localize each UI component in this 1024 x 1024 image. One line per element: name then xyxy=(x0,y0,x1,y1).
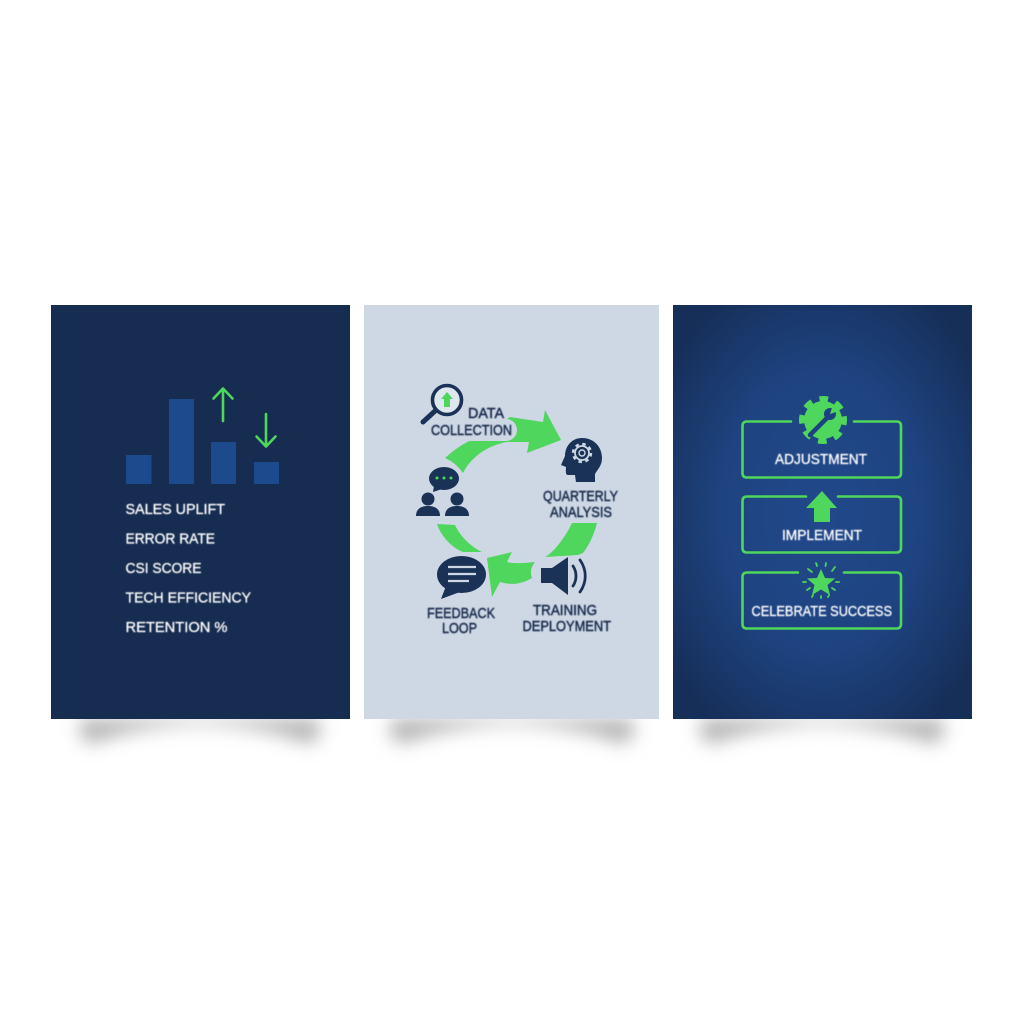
label: implement: IMPLEMENT xyxy=(782,527,862,544)
icon: up arrow xyxy=(806,491,837,522)
label: feedback loop: FEEDBACK xyxy=(427,605,495,622)
box: implement xyxy=(742,491,901,552)
label: data collection: DATA xyxy=(468,405,504,422)
label: training deployment xyxy=(522,602,611,635)
icon: up arrow xyxy=(214,388,232,421)
label: quarterly analysis: QUARTERLY xyxy=(543,488,618,505)
label: data collection: COLLECTION xyxy=(431,422,512,439)
arrow: analysis to training xyxy=(545,523,597,557)
panel: metrics xyxy=(51,305,350,719)
arrow: training to feedback xyxy=(487,552,535,597)
label: adjustment: ADJUSTMENT xyxy=(775,451,867,468)
icon: head with gear xyxy=(561,438,602,482)
label: feedback loop xyxy=(427,605,495,637)
label: quarterly analysis: ANALYSIS xyxy=(550,504,612,521)
metrics list xyxy=(126,501,251,636)
metrics list: ERROR RATE xyxy=(126,530,215,548)
icon: star with rays xyxy=(803,563,839,598)
label: data collection xyxy=(426,405,517,441)
metrics list: SALES UPLIFT xyxy=(126,501,225,518)
metrics list: CSI SCORE xyxy=(126,560,202,577)
icon: speech bubble with people xyxy=(416,467,469,516)
label: quarterly analysis xyxy=(543,488,618,521)
metrics list: RETENTION % xyxy=(126,619,228,636)
box: celebrate success xyxy=(742,563,901,628)
metrics list: TECH EFFICIENCY xyxy=(126,590,251,606)
box: adjustment xyxy=(742,396,901,478)
label: feedback loop: LOOP xyxy=(442,620,477,637)
icon: gear and wrench xyxy=(799,396,847,444)
icon: down arrow xyxy=(256,414,276,446)
panel: improvement cycle xyxy=(364,305,659,719)
panel shadows xyxy=(80,719,944,744)
icon: feedback bubble xyxy=(437,556,486,599)
panel: action steps xyxy=(673,305,972,719)
label: training deployment: TRAINING xyxy=(533,602,597,619)
bar chart xyxy=(126,399,279,484)
label: training deployment: DEPLOYMENT xyxy=(522,618,611,635)
label: celebrate success: CELEBRATE SUCCESS xyxy=(752,603,892,620)
icon: magnifier xyxy=(423,386,462,422)
icon: speaker xyxy=(541,557,585,595)
arrow: data collection to analysis xyxy=(445,410,561,473)
arrow: feedback to people xyxy=(437,524,482,552)
